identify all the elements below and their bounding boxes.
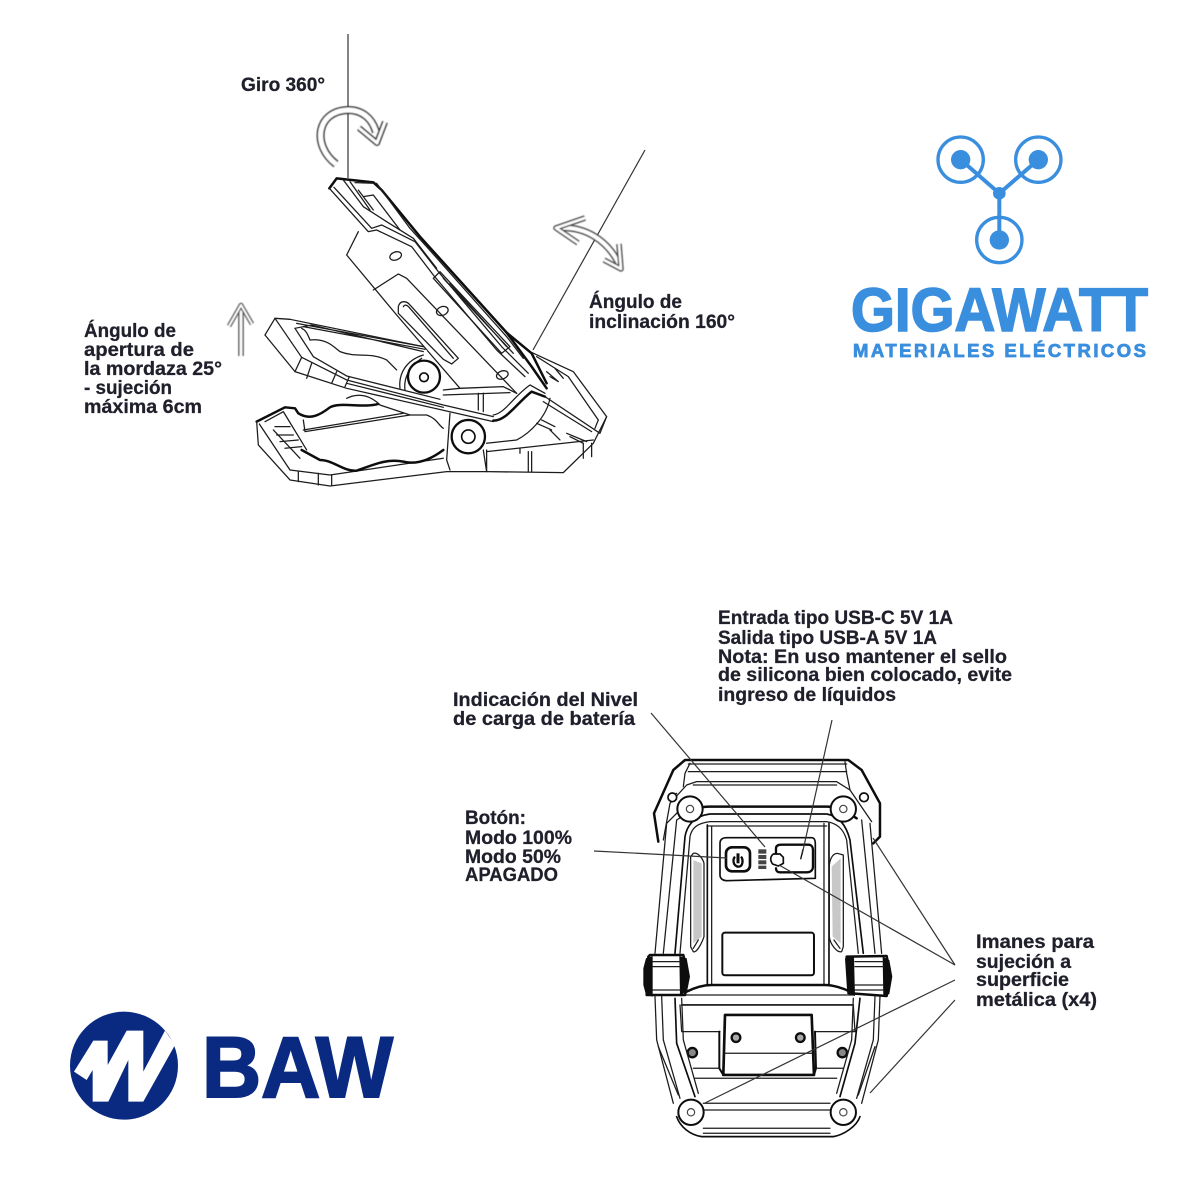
label: tilt angle: Ángulo de — [589, 291, 682, 313]
label: button modes: Botón: — [465, 808, 526, 829]
lower jaw — [257, 395, 607, 486]
bottom handle — [677, 1103, 860, 1137]
USB silicone seal — [776, 845, 813, 872]
pivot knob lower — [447, 413, 487, 472]
hinge right — [845, 956, 892, 997]
icon: jaw opening arrow — [229, 305, 252, 356]
lower frame tubes — [655, 997, 880, 1103]
label: battery indicator: Indicación del Nivel — [453, 690, 638, 711]
label: USB ports: de silicona bien colocado, evite — [718, 665, 1012, 686]
power button — [726, 847, 750, 871]
label: button modes: Modo 50% — [465, 847, 561, 868]
label: magnets: metálica (x4) — [976, 990, 1097, 1011]
pivot knob upper — [408, 361, 440, 393]
arm and rear shell — [443, 333, 607, 443]
hinge left — [643, 955, 690, 997]
label: USB ports: ingreso de líquidos — [718, 685, 896, 706]
housing panel — [682, 823, 853, 1005]
label: USB ports: Salida tipo USB-A 5V 1A — [718, 628, 937, 649]
lamp rear body — [347, 232, 517, 393]
logo: Gigawatt — [851, 137, 1148, 361]
label plate — [722, 933, 814, 975]
rotation axis line — [347, 34, 349, 178]
label: magnets — [976, 932, 1097, 1011]
label: jaw opening: máxima 6cm — [84, 397, 202, 418]
corner magnets — [677, 796, 856, 1125]
icon: BAW circle — [70, 1012, 178, 1120]
label: magnets: superficie — [976, 970, 1069, 991]
upper jaw — [265, 318, 493, 422]
top handle — [654, 760, 880, 843]
label: jaw opening — [84, 320, 222, 418]
label: jaw opening: - sujeción — [84, 378, 172, 399]
label: jaw opening: apertura de — [84, 340, 194, 361]
device rear view drawing — [643, 760, 892, 1137]
icon: Gigawatt three nodes — [938, 137, 1061, 263]
logo: Gigawatt: GIGAWATT — [851, 276, 1148, 344]
bracket and screws — [680, 1005, 855, 1078]
side frame tubes upper — [655, 807, 882, 953]
label: button modes: APAGADO — [465, 865, 558, 886]
label: battery indicator: de carga de batería — [453, 709, 635, 730]
control panel — [720, 838, 815, 881]
icon: tilt arrow — [556, 218, 621, 269]
label: button modes — [465, 808, 572, 886]
label: jaw opening: la mordaza 25° — [84, 359, 222, 380]
label: Giro 360: Giro 360° — [241, 75, 325, 96]
label: USB ports: Entrada tipo USB-C 5V 1A — [718, 608, 953, 629]
label: magnets: Imanes para — [976, 932, 1094, 953]
lamp head — [329, 178, 547, 388]
label: USB ports — [718, 608, 1012, 706]
label: tilt angle — [589, 291, 735, 333]
logo: BAW: BAW — [202, 1020, 394, 1116]
clamp work light drawing — [257, 178, 607, 486]
label: button modes: Modo 100% — [465, 828, 572, 849]
label: USB ports: Nota: En uso mantener el sello — [718, 647, 1007, 668]
icon: rotation arrow 360 — [321, 110, 385, 164]
logo: BAW — [70, 1012, 394, 1120]
label: tilt angle: inclinación 160° — [589, 312, 735, 333]
label: magnets: sujeción a — [976, 952, 1071, 973]
battery level indicator — [758, 849, 766, 869]
tilt axis line — [533, 150, 645, 350]
label: battery indicator — [453, 690, 638, 730]
logo: Gigawatt: MATERIALES ELÉCTRICOS — [853, 340, 1146, 361]
leader lines — [594, 713, 955, 1103]
label: jaw opening: Ángulo de — [84, 320, 176, 342]
